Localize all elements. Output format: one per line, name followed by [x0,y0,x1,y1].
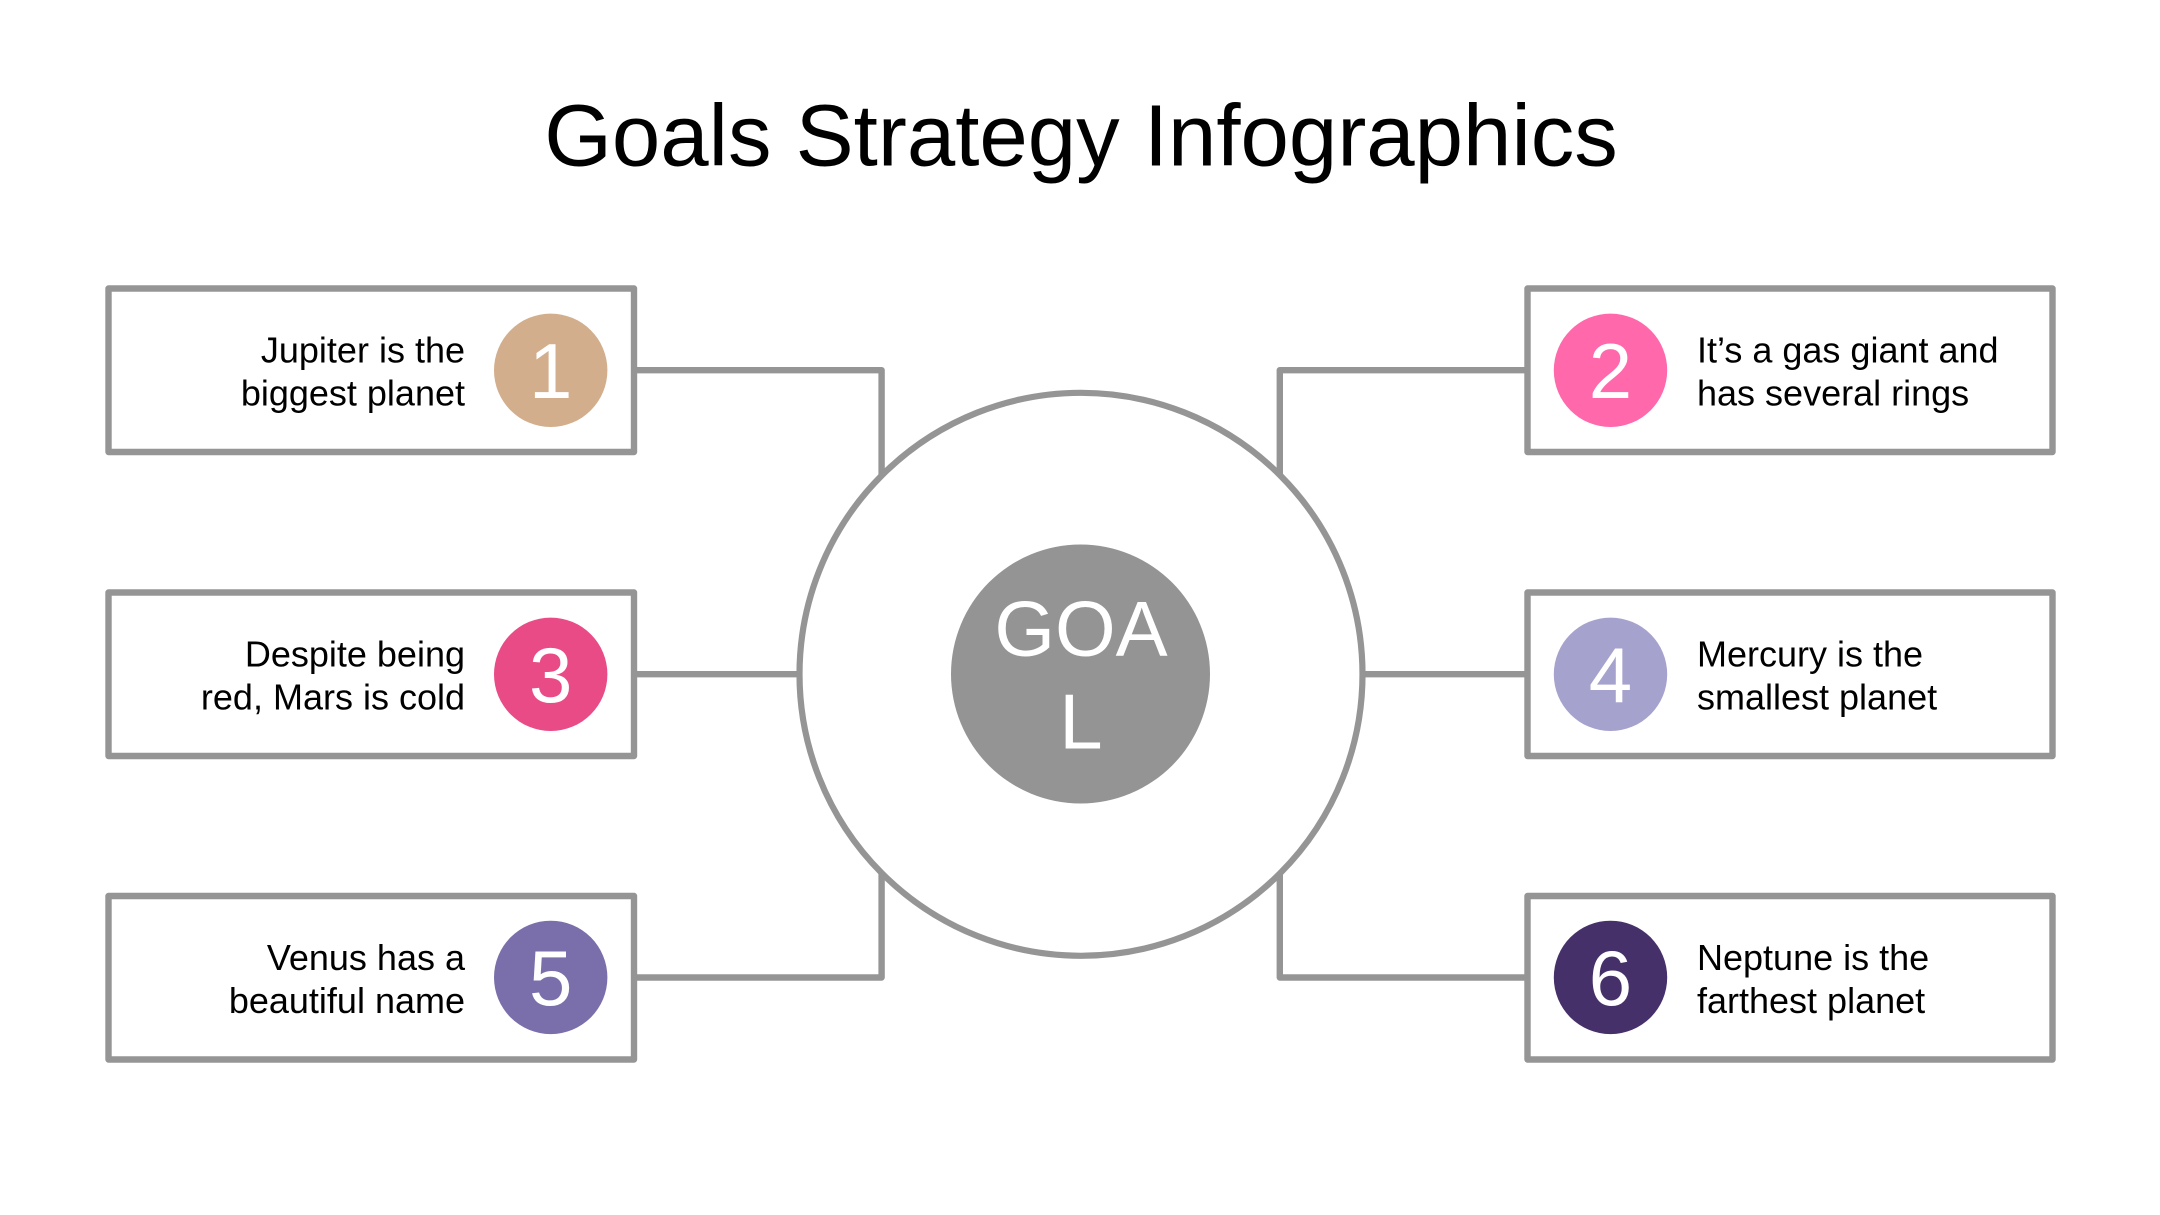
panel: item 1 [108,288,634,452]
item 1 text: biggest planet [241,372,465,414]
connector: item 1 to centre [634,370,882,480]
item 2 number badge [1554,314,1667,427]
item 6 text: Neptune is the [1697,937,1929,978]
item 6 text: farthest planet [1697,980,1925,1021]
item 3 number badge: 3 [529,631,572,719]
panel: item 2 [1528,288,2052,452]
item 5 number badge [494,921,607,1034]
item 3 text: red, Mars is cold [201,676,465,718]
title: Goals Strategy Infographics [544,88,1618,184]
item 1 number badge: 1 [529,327,572,415]
item 6 number badge: 6 [1589,934,1632,1022]
item 5 number badge: 5 [529,934,572,1022]
item 1 number badge [494,314,607,427]
goal label: GOA [994,584,1168,672]
connector: item 5 to centre [634,870,882,978]
connector: item 3 to centre [634,671,800,677]
item 3 text: Despite being [245,634,465,674]
item 6 number badge [1554,921,1667,1034]
inner goal circle [951,544,1210,804]
panel: item 6 [1528,896,2052,1060]
outer ring [800,393,1362,956]
panel: item 5 [108,896,634,1060]
connector: item 4 to centre [1362,671,1528,677]
connector: item 2 to centre [1280,370,1528,480]
item 2 text: has several rings [1697,372,1969,414]
goal label: L [1059,678,1103,766]
item 4 text: Mercury is the [1697,634,1923,674]
item 2 text: It’s a gas giant and [1697,330,1999,370]
item 4 number badge: 4 [1589,631,1632,719]
panel: item 3 [108,592,634,756]
item 3 number badge [494,618,607,731]
item 5 text: Venus has a [267,937,466,978]
central goal diagram [800,393,1362,956]
item 2 number badge: 2 [1589,327,1632,415]
item 5 text: beautiful name [229,980,465,1021]
item 4 number badge [1554,618,1667,731]
item 4 text: smallest planet [1697,676,1937,718]
item 1 text: Jupiter is the [261,330,465,370]
panel: item 4 [1528,592,2052,756]
connector: item 6 to centre [1280,870,1528,978]
